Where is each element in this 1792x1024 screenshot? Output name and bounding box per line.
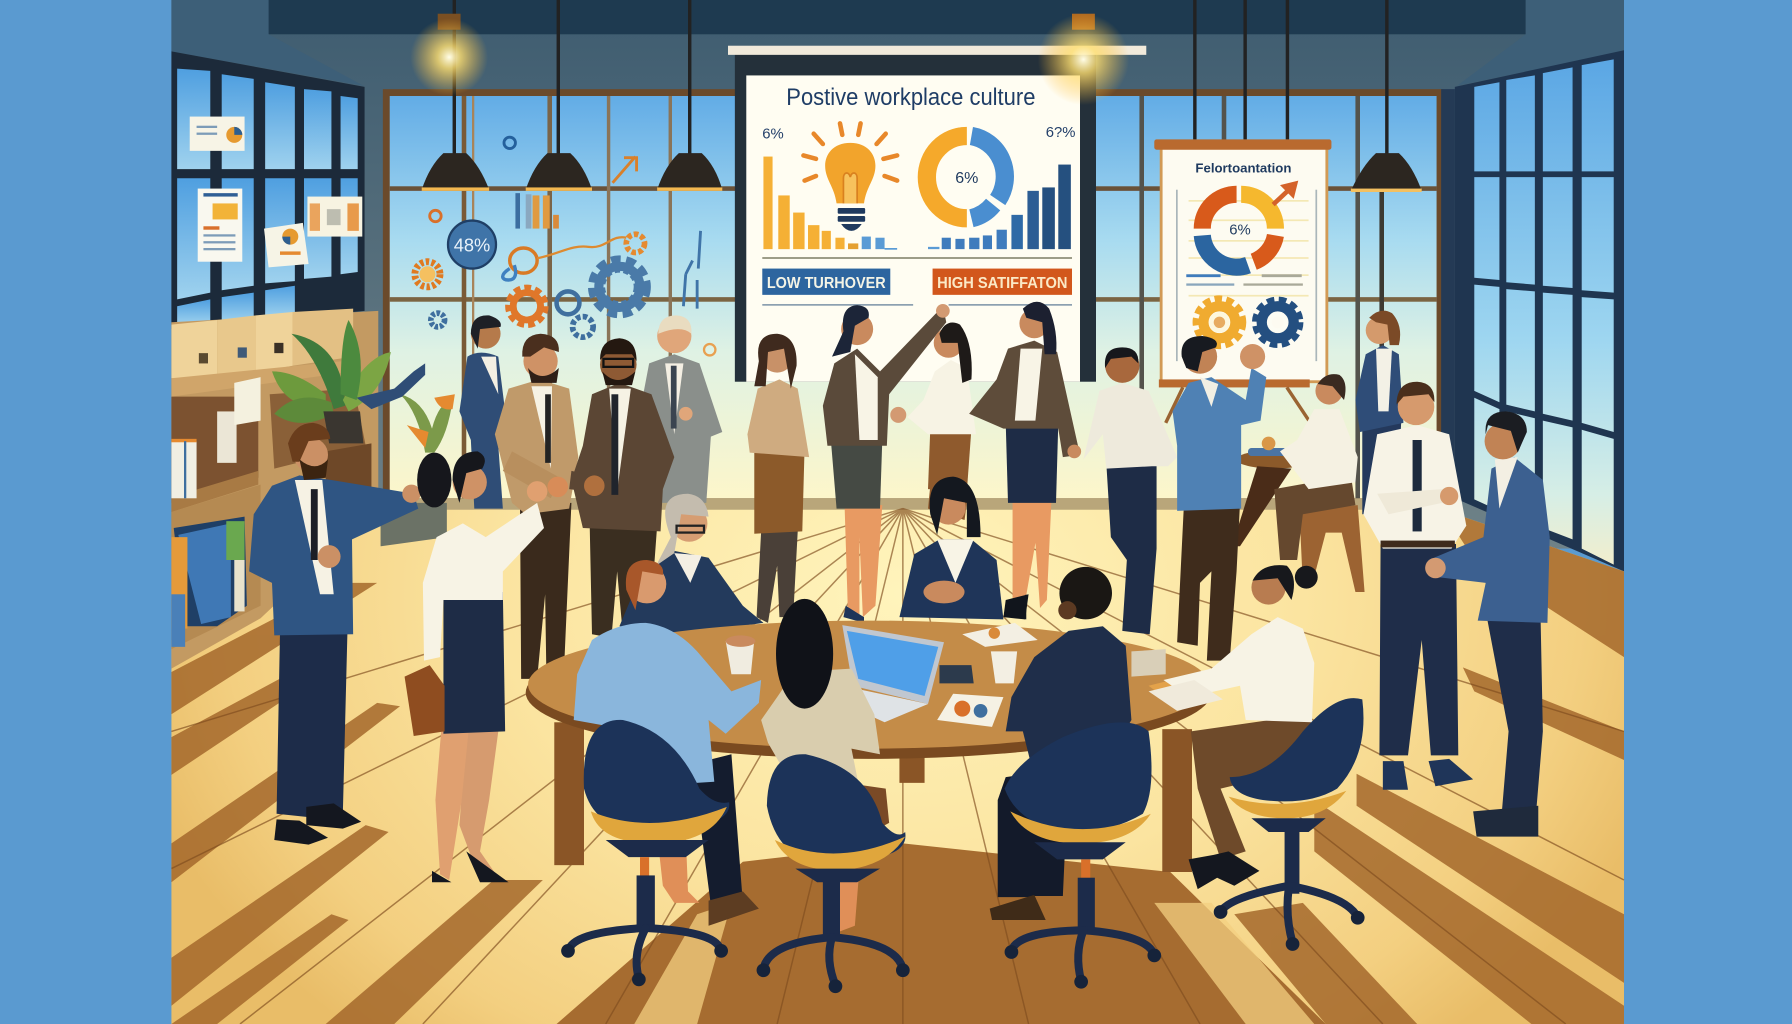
orange arrow [1273,186,1293,205]
navy gear [1257,302,1298,343]
person: woman dark hair from behind [761,599,889,840]
person: woman navy jacket by chart [1355,311,1403,514]
pale wedges in brown zone [634,903,1314,1024]
declining bar chart [763,157,897,250]
colorful report [937,694,1003,727]
person: man blue shirt [1173,336,1266,661]
icon: small bar chart [515,193,559,229]
side band left [0,0,171,1024]
notebook and binder right [1131,649,1211,703]
easel legs [1166,387,1312,425]
right side window [1455,50,1624,571]
screen surface [746,75,1080,382]
table papers [962,623,1038,647]
lamp 2 [526,0,592,191]
floor shadow bands [171,510,1624,1024]
grey shadow behind arm [381,503,447,546]
shelf unit [171,311,378,669]
gold gear [1198,301,1241,344]
chart heading: Felortoantation [1195,161,1291,176]
board [1161,146,1327,382]
small flowering plant [400,394,455,453]
flip chart cables [1193,0,1289,139]
person: woman brown blazer navy skirt [969,302,1081,619]
icon: thin arrow [613,157,637,183]
flip chart donut: 6% [1229,222,1251,238]
bottom rail [1159,379,1310,387]
icon: sun gear [415,262,440,287]
flip chart donut [1202,194,1275,267]
icon: small circles [430,137,715,355]
person: woman center white blouse [890,323,976,520]
round table group [526,477,1211,872]
back wall and ceiling [171,0,1624,549]
person: seated man blue shirt from behind [574,560,761,926]
person: woman seated center [899,477,1029,619]
second cup [991,651,1017,683]
person: woman tan blouse brown skirt [747,334,809,623]
papers pinned on left window [190,117,362,267]
people standing in back [249,302,1550,882]
coffee cup [726,635,755,674]
right percent: 6?% [1046,125,1075,141]
person: man white shirt from behind [1083,347,1177,634]
legs behind middle chair [823,869,859,931]
ceiling spotlight right [1038,14,1129,105]
icon: light bulb [803,123,897,231]
chair back third [1005,722,1161,989]
low turnover badge: LOW TURHOVER [767,275,886,292]
person: woman pointing, dark blazer [823,304,950,623]
paper: pie chart report [264,223,309,267]
lamp 1 [422,0,489,191]
projection screen [728,46,1146,382]
left side window [171,51,365,329]
main window [383,89,1455,512]
person: man white shirt tie [1363,382,1473,790]
wooden floor [171,503,1624,1024]
person: woman white blouse ponytail [405,451,547,882]
icon: small orange gear [626,234,645,253]
person: hand and arm behind plant [357,363,425,409]
side band right [1624,0,1792,1024]
person: seated woman at small table [1274,374,1365,592]
ceiling spotlight left [410,14,488,96]
icon: percentage badge: 48% [454,234,490,255]
icon: percentage badge [448,221,496,269]
white binders [171,439,197,498]
pendant lamps [410,0,1422,192]
brown zone under table [557,843,1326,1024]
person: man dark curly hair from behind [990,567,1131,920]
laptop [834,625,944,722]
person: man glasses brown jacket [569,338,674,638]
person: front left man navy suit [249,423,421,845]
text lines [1186,274,1303,286]
title: Postive workplace culture [786,84,1035,111]
small table with food [1232,437,1312,546]
paper: pie chart note [190,117,245,151]
paper: orange list [307,197,362,237]
chair back left [561,720,729,986]
lamp 3 [657,0,722,191]
flip chart [1154,139,1331,387]
low turnover badge [762,269,890,295]
storage boxes [171,309,353,378]
chair back middle [757,754,910,993]
icon: small blue gears [431,291,593,337]
legs behind left chair [657,834,699,903]
large plant [272,320,391,443]
top rail [1154,139,1331,150]
dark shelf compartment upper [171,397,258,503]
screen frame [735,50,1096,382]
icon: squiggle of linked rings [503,237,626,280]
lamp 4 [1351,0,1422,192]
left shelving [171,309,455,669]
phone [939,665,974,683]
table leg center [899,749,925,783]
high satisfaction badge [933,269,1072,295]
chair back right [1214,698,1365,951]
icon: large blue gear [597,264,642,310]
high satisfaction badge: HIGH SATIFFATON [937,275,1067,292]
person: man navy side profile [1425,411,1550,837]
window decoration icons [415,137,715,355]
rising bar chart [928,165,1071,249]
table leg left [554,722,584,865]
paper: clipboard report [198,189,242,262]
wall note [234,377,261,425]
donut chart: 6% [955,170,978,187]
left percent: 6% [762,126,784,142]
person: bearded man tan jacket [495,334,578,679]
person: woman navy suit [459,315,505,509]
person: woman white shirt bun [1149,565,1318,889]
blue binders [171,517,247,647]
roller bar [728,46,1146,55]
donut chart [927,136,1005,218]
dark shelf compartment right [270,389,366,469]
icon: blue abstract figure [683,231,701,309]
icon: orange gear [511,290,543,322]
table leg right [1162,729,1192,872]
person: older woman glasses [619,494,763,634]
table top [526,621,1211,759]
front chairs and seated people [561,560,1365,993]
person: gray suit man [640,315,722,503]
